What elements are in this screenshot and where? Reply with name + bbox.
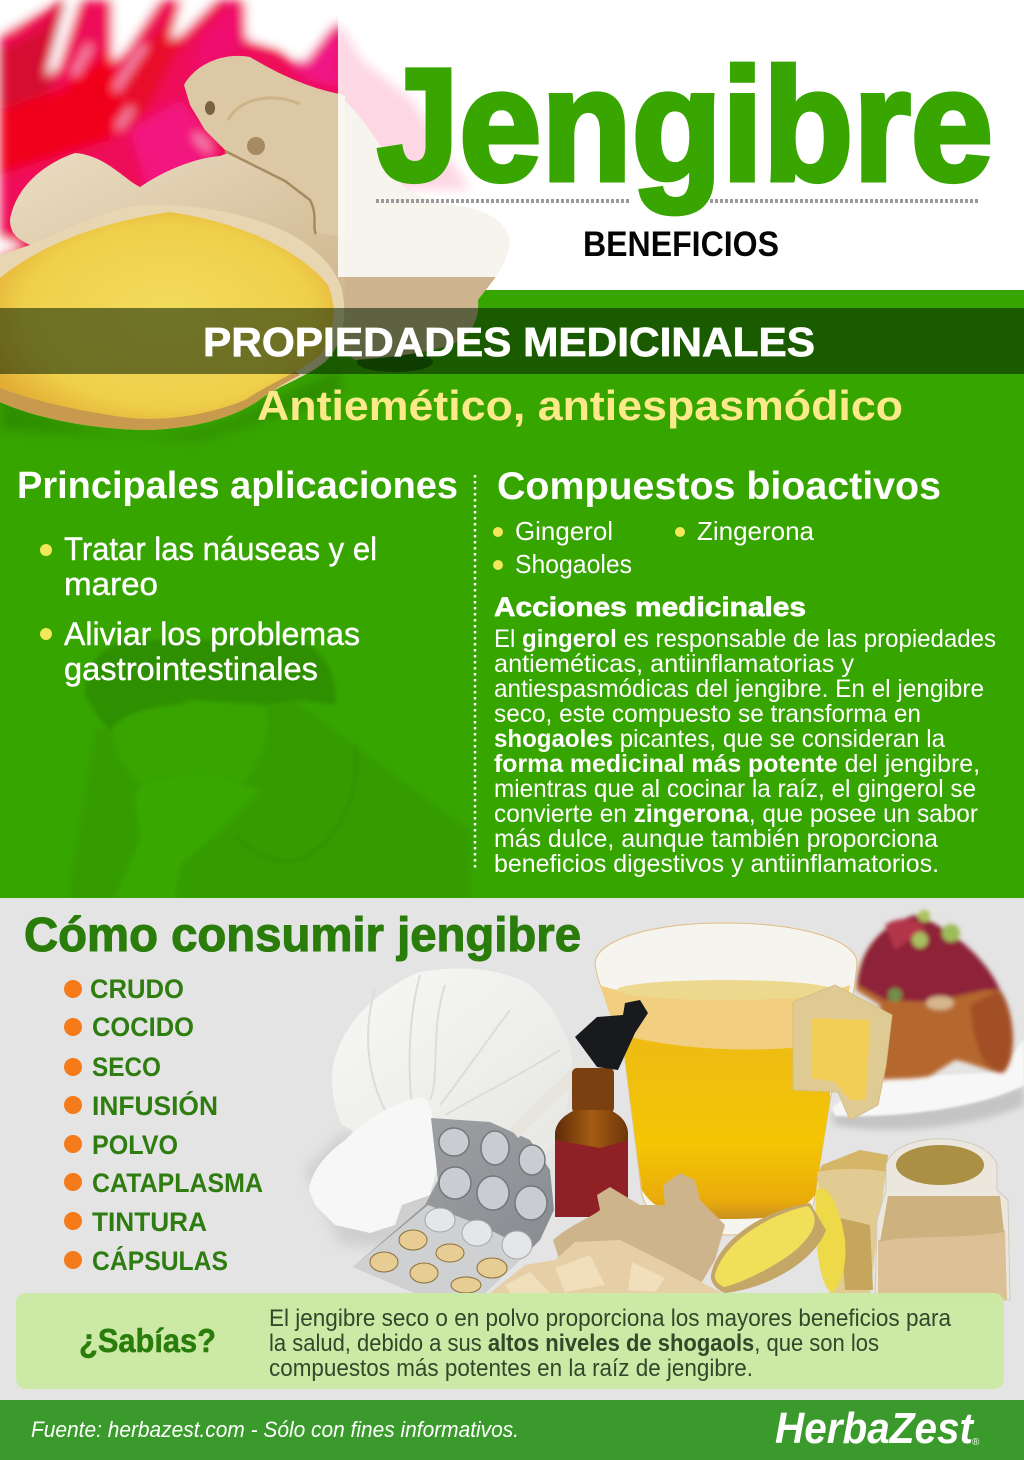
heading: medicinal actions: Acciones medicinales [494, 592, 806, 622]
woman hand [115, 775, 260, 898]
woman face [112, 703, 267, 800]
callout background [16, 1293, 1004, 1389]
ginger left lump and middle body [10, 140, 345, 300]
pouch folds [368, 975, 560, 1115]
empty blisters [439, 1128, 547, 1220]
list: applications: mareo [64, 566, 158, 602]
root [553, 1173, 725, 1285]
list: consumption forms: SECO [92, 1052, 161, 1082]
text block: medicinal actions: El gingerol es responsable de las propiedades [494, 625, 996, 653]
jar glass [875, 1139, 1010, 1300]
cup handle highlights [812, 1018, 870, 1100]
cup glass [595, 923, 857, 1235]
image: ginger root and dried slices [490, 1173, 725, 1293]
dropper tube [510, 1058, 592, 1138]
front slice flesh [715, 1206, 815, 1287]
logo: HerbaZest: ® [972, 1437, 980, 1448]
text block: medicinal actions: antieméticas, antiinflamatorias y [494, 650, 855, 678]
tea liquid [622, 1035, 830, 1219]
ginger right side body [328, 95, 510, 360]
ginger upper knob [184, 56, 345, 238]
image: glass cup of ginger tea [595, 923, 892, 1235]
list: consumption forms: TINTURA [92, 1207, 207, 1237]
heading: medicinal properties: PROPIEDADES MEDICINALES [203, 319, 815, 365]
image: blister pack of capsules [353, 1118, 554, 1293]
image: blurred food on plate [830, 910, 1024, 1130]
jar middle powder [880, 1196, 1004, 1242]
section heading: bioactive compounds: Compuestos bioactivos [497, 465, 941, 508]
list: applications [40, 531, 377, 687]
text block: medicinal actions: más dulce, aunque también proporciona [494, 825, 938, 853]
list: compounds: Zingerona [697, 516, 815, 546]
list: consumption forms: CATAPLASMA [92, 1168, 263, 1198]
list: compounds: Shogaoles [515, 549, 632, 579]
blister foil [353, 1118, 554, 1293]
list: compounds: Gingerol [515, 516, 613, 546]
subheading: antiemetic: Antiemético, antiespasmódico [257, 382, 903, 429]
panel: dark band [0, 308, 1024, 374]
footer source text: Fuente: herbazest.com - Sólo con fines informativos. [31, 1417, 519, 1442]
subtitle: BENEFICIOS [583, 225, 779, 264]
woman shirt collar [235, 745, 356, 862]
pouch body [332, 968, 572, 1160]
ginger eyes [205, 98, 300, 155]
callout text: El jengibre seco o en polvo proporciona los mayores beneficios para [269, 1305, 952, 1332]
bottle neck [572, 1068, 614, 1113]
callout heading: ¿Sabías? [79, 1322, 216, 1359]
panel: green properties background [0, 290, 1024, 898]
text block: medicinal actions [494, 625, 996, 878]
callout text [269, 1305, 952, 1382]
ginger cut face [0, 212, 334, 419]
food [856, 910, 1013, 1080]
dotted vertical divider [474, 475, 476, 870]
list: applications: Tratar las náuseas y el [64, 531, 377, 567]
lower empty blisters [425, 1208, 532, 1259]
list: consumption forms: COCIDO [92, 1012, 194, 1042]
text block: medicinal actions: shogaoles picantes, que se consideran la [494, 725, 945, 753]
bottle body [555, 1110, 628, 1217]
image: white cloth poultice [305, 968, 572, 1250]
text block: medicinal actions: beneficios digestivos y antiinflamatorios. [494, 850, 939, 878]
tea surface [617, 980, 833, 1000]
section heading: main applications: Principales aplicaciones [17, 465, 458, 507]
list: consumption forms [64, 974, 263, 1276]
panel: footer [0, 1400, 1024, 1460]
middle root piece [817, 1169, 886, 1293]
plate shadow [830, 1085, 1024, 1130]
inner root piece [840, 1218, 873, 1290]
list: applications: gastrointestinales [64, 651, 318, 687]
cup handle [793, 985, 892, 1120]
woman hair [85, 640, 336, 735]
image: ginger root with cut yellow face [0, 56, 510, 440]
dotted divider under title [376, 199, 980, 203]
dropper cap [575, 1000, 648, 1070]
list: consumption forms: CRUDO [90, 974, 184, 1004]
side slice [816, 1188, 845, 1293]
list: compounds [493, 516, 815, 579]
jar powder [878, 1230, 1007, 1300]
shadow beneath ginger on green [0, 370, 340, 440]
list: consumption forms: CÁPSULAS [92, 1245, 228, 1276]
ginger rim [0, 205, 344, 430]
image: dropper and amber bottle [510, 1000, 648, 1217]
pouch knot [309, 1097, 438, 1233]
image: jar of ginger powder [875, 1139, 1010, 1300]
callout text: compuestos más potentes en la raíz de jengibre. [269, 1355, 753, 1382]
shadow behind right lobe [357, 352, 433, 372]
pouch shadow [305, 1130, 438, 1250]
callout text: la salud, debido a sus altos niveles de shogaols, que son los [269, 1330, 879, 1357]
translucent white overlay on photo [338, 15, 1024, 277]
list: applications: Aliviar los problemas [64, 616, 360, 652]
bottle shoulder [555, 1110, 628, 1148]
plate [832, 1038, 1024, 1116]
heading: how to consume ginger: Cómo consumir jengibre [24, 909, 581, 962]
slice highlights [505, 1255, 665, 1293]
text block: medicinal actions: convierte en zingerona, que posee un sabor [494, 800, 978, 828]
image: blurred red and pink flower [0, 0, 470, 300]
text block: medicinal actions: seco, este compuesto se transforma en [494, 700, 921, 728]
front slice [711, 1203, 826, 1293]
text block: medicinal actions: antiespasmódicas del jengibre. En el jengibre [494, 675, 984, 703]
list: consumption forms: INFUSIÓN [92, 1090, 218, 1121]
image: sliced ginger [711, 1150, 888, 1293]
ginger lower rim [0, 362, 300, 430]
dried slices [490, 1240, 722, 1293]
ginger crease [225, 151, 316, 234]
blister lower foil [353, 1205, 530, 1293]
logo: HerbaZest: HerbaZest [775, 1404, 975, 1453]
tea upper tint [600, 985, 850, 1050]
image: nauseous woman silhouette [68, 640, 470, 898]
panel: grey consumption background [0, 898, 1024, 1400]
list: consumption forms: POLVO [92, 1130, 178, 1160]
woman body [68, 700, 470, 898]
background root piece [815, 1150, 888, 1180]
text block: medicinal actions: forma medicinal más potente del jengibre, [494, 750, 980, 778]
text block: medicinal actions: mientras que al cocinar la raíz, el gingerol se [494, 775, 976, 803]
jar powder top [896, 1145, 984, 1185]
title: Jengibre [377, 35, 993, 214]
callout: did you know [16, 1293, 1004, 1389]
capsules [370, 1230, 507, 1293]
